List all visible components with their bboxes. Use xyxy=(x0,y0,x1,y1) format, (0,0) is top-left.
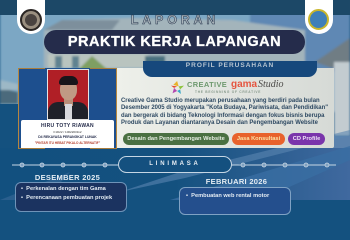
list item: • Perencanaan pembuatan projek xyxy=(21,195,112,201)
panel: company profile xyxy=(116,68,334,148)
heading: profil perusahaan: PROFIL PERUSAHAAN xyxy=(186,62,274,69)
heading: linimasa xyxy=(118,156,232,173)
tag: desain dan pengembangan website xyxy=(123,133,229,145)
panel: februari 2026 list xyxy=(179,187,291,215)
tag: cd profile xyxy=(288,133,325,145)
timeline decoration right xyxy=(232,162,336,168)
company description: dan bergerak di bidang Teknologi Informasi dengan fokus bisnis berupa xyxy=(121,113,324,119)
tag: cd profile: CD Profile xyxy=(293,136,320,142)
tag: desain dan pengembangan website: Desain dan Pengembangan Website xyxy=(127,136,225,142)
title: praktik kerja lapangan xyxy=(44,30,305,54)
list item: • Pembuatan web rental motor xyxy=(186,192,269,198)
logo: creative gama studio xyxy=(171,79,284,94)
company description: Creative Gama Studio merupakan perusahaan yang berdiri pada bulan xyxy=(121,98,320,104)
heading: februari 2026: FEBRUARI 2026 xyxy=(206,177,267,186)
student name: HIRU TOTY RIAWAN xyxy=(41,123,94,129)
hair xyxy=(59,76,78,85)
left logo tab xyxy=(17,0,45,34)
right logo tab xyxy=(305,0,333,34)
neck xyxy=(64,97,73,106)
icon: institution logo xyxy=(308,9,329,30)
company description: Produk dan Layanan diantaranya Desain dan Pengembangan Website xyxy=(121,120,318,126)
student photo xyxy=(47,69,89,120)
company description xyxy=(121,98,328,126)
wordmark studio: Studio xyxy=(258,79,284,90)
program: D4 REKAYASA PERANGKAT LUNAK xyxy=(38,135,97,139)
company description: Desember 2005 di Yogyakarta "Kota Budaya, Pariwisata, dan Pendidikan" xyxy=(121,105,328,111)
heading: profil perusahaan xyxy=(143,61,317,77)
tagline: THE BEGINNING OF CREATIVE xyxy=(195,90,261,94)
frame bracket right xyxy=(90,68,117,149)
panel: student card xyxy=(18,68,117,149)
list item: • Perkenalan dengan tim Gama xyxy=(21,186,106,192)
heading: laporan: LAPORAN xyxy=(131,13,219,27)
icon: colorful star xyxy=(171,81,184,94)
timeline decoration left xyxy=(12,162,118,168)
icon: campus logo xyxy=(20,9,42,31)
name card xyxy=(21,120,114,148)
heading: linimasa: LINIMASA xyxy=(149,161,201,167)
heading: desember 2025: DESEMBER 2025 xyxy=(35,173,100,182)
motto: "PINTAR ITU HEBAT PIKALO ALTERNATIF" xyxy=(35,141,100,145)
tag: jasa konsultasi xyxy=(232,133,285,145)
jacket xyxy=(48,102,88,120)
panel: desember 2025 list xyxy=(15,182,127,212)
shirt xyxy=(65,104,72,119)
frame bracket left xyxy=(18,68,45,149)
student id: F1D22 / 1002203112 xyxy=(54,130,81,134)
wordmark gama: gama xyxy=(231,79,257,90)
title: praktik kerja lapangan: PRAKTIK KERJA LAPANGAN xyxy=(68,34,281,50)
tag: jasa konsultasi: Jasa Konsultasi xyxy=(237,136,280,142)
face xyxy=(60,79,77,100)
wordmark creative: CREATIVE xyxy=(187,80,227,89)
